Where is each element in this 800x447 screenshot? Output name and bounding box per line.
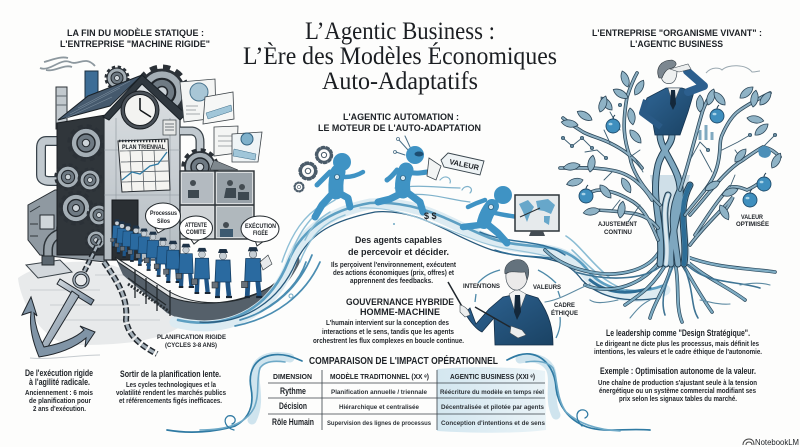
heading: agentic automation: LE MOTEUR DE L'AUTO-ADAPTATION: [318, 123, 481, 134]
callout: execution figee: [241, 216, 279, 246]
plan calendar: [118, 139, 170, 192]
label: cadre ethique: [551, 302, 579, 317]
heading: agentic automation: L'AGENTIC AUTOMATION :: [343, 112, 459, 123]
highlight column: [437, 367, 546, 433]
table header: DIMENSION: [273, 372, 312, 381]
callout: execution figee: EXÉCUTION: [245, 222, 276, 230]
leaves: [619, 70, 631, 88]
illustration: visionary leader in tree: [642, 60, 760, 135]
river of agentic flow: [175, 177, 665, 326]
text: execution rigide: [25, 368, 93, 413]
door and platform: [112, 200, 138, 260]
text: execution rigide: à l'agilité radicale.: [29, 377, 90, 387]
right pipe: [180, 131, 200, 152]
text: sortir de la planification: [116, 369, 226, 405]
text: exemple optimisation: [598, 366, 757, 403]
clock: [121, 91, 159, 129]
row: role humain: [272, 417, 545, 427]
plan calendar: PLAN TRIENNAL: [122, 144, 165, 151]
heading: organisme vivant: [592, 28, 762, 50]
text: sortir de la planification: Les cycles technologiques et la: [126, 380, 217, 389]
heading: machine rigide: [60, 27, 210, 50]
smoke: [40, 57, 95, 70]
chimneys: [56, 87, 67, 129]
row: decision: Hiérarchique et centralisée: [339, 404, 419, 411]
label: cadre ethique: ÉTHIQUE: [551, 308, 579, 317]
label: planification rigide: [157, 334, 227, 349]
callout: attente comite: ATTENTE: [185, 223, 207, 229]
branches: [560, 73, 780, 245]
text: gouvernance hybride: HOMME-MACHINE: [360, 307, 440, 317]
text: sortir de la planification: volatilité rendent les marchés publics: [116, 388, 226, 397]
text: sortir de la planification: et référencements figés inefficaces.: [119, 396, 222, 405]
text: execution rigide: De l'exécution rigide: [25, 368, 93, 378]
text: agents capables: [331, 235, 456, 285]
icon: world map monitor: [515, 195, 559, 236]
text: execution rigide: de planification pour: [29, 396, 91, 405]
text: execution rigide: Anciennement : 6 mois: [25, 388, 93, 397]
row: decision: [279, 401, 544, 411]
text: sortir de la planification: Sortir de la planification lente.: [120, 369, 221, 379]
heading: organisme vivant: L'ENTREPRISE "ORGANISME VIVANT" :: [592, 28, 762, 39]
text: exemple optimisation: Une chaîne de production s'ajustant seule à la tension: [598, 378, 757, 387]
title: L’Agentic Business :: [305, 18, 495, 45]
callout: processus silos: Silos: [157, 219, 171, 225]
trunk: [650, 175, 690, 264]
heading: machine rigide: L'ENTREPRISE "MACHINE RIGIDE": [60, 39, 210, 50]
table header: [273, 372, 535, 381]
apples: [606, 115, 620, 133]
label: intentions: INTENTIONS: [463, 283, 501, 290]
label: valeur optimisee: OPTIMISÉE: [736, 219, 770, 228]
roof: [58, 75, 142, 120]
left pipe: [41, 141, 60, 181]
text: agents capables: Ils perçoivent l'environnement, exécutent: [331, 260, 456, 269]
heading: agentic automation: [318, 112, 481, 134]
text: gouvernance hybride: orchestrent les flux complexes en boucle continue.: [313, 336, 464, 345]
text: gouvernance hybride: GOUVERNANCE HYBRIDE: [346, 297, 454, 307]
label: planification rigide: PLANIFICATION RIGIDE: [157, 334, 227, 341]
text: exemple optimisation: énergétique ou un système commercial modifiant ses: [599, 386, 756, 395]
callout: attente comite: [180, 216, 212, 244]
offices: [180, 171, 254, 239]
workers queue: [111, 219, 272, 297]
pump: [48, 232, 64, 262]
title: [243, 18, 557, 95]
front wall: [104, 80, 180, 260]
row: decision: Décentralisée et pilotée par agents: [441, 404, 544, 411]
heading: machine rigide: LA FIN DU MODÈLE STATIQUE :: [67, 27, 204, 39]
table heading: COMPARAISON DE L'IMPACT OPÉRATIONNEL: [309, 355, 498, 367]
text: gouvernance hybride: L'humain intervient sur la conception des: [326, 318, 449, 327]
row: role humain: Conception d'intentions et de sens: [441, 420, 545, 427]
back gear: [138, 68, 186, 116]
text: leadership design strategique: Le leadership comme "Design Stratégique".: [606, 328, 750, 338]
label: ajustement continu: [598, 221, 637, 236]
agent: second: [378, 136, 427, 212]
row: rythme: Planification annuelle / triennale: [331, 389, 427, 396]
text: agents capables: de percevoir et décider.: [348, 247, 449, 257]
text: leadership design strategique: Le dirigeant ne dicte plus les processus, mais définit les: [596, 339, 759, 348]
grid: [268, 370, 545, 430]
callout: processus silos: [146, 203, 180, 233]
tag: valeur: [427, 153, 484, 180]
callout: execution figee: FIGÉE: [253, 229, 268, 237]
text: gouvernance hybride: interactions et le sens, tandis que les agents: [322, 327, 454, 336]
label: valeur optimisee: VALEUR: [741, 214, 763, 221]
label: ajustement continu: CONTINU: [604, 229, 632, 236]
callout: attente comite: COMITE: [186, 230, 206, 236]
table header: AGENTIC BUSINESS (XXI ᵉ): [450, 372, 535, 381]
text: exemple optimisation: prix selon les signaux tables du marché.: [619, 394, 737, 403]
label: planification rigide: (CYCLES 3-8 ANS): [165, 342, 217, 349]
tag: valeur: VALEUR: [449, 157, 480, 172]
wave frame left: [167, 355, 302, 432]
text: gouvernance hybride: [313, 297, 464, 345]
title: L’Ère des Modèles Économiques: [243, 42, 557, 70]
ground: [18, 262, 190, 345]
agent: third: [463, 186, 518, 243]
icon: anchor: [22, 273, 100, 358]
text: execution rigide: 2 ans d'exécution.: [33, 404, 86, 413]
callout: processus silos: Processus: [150, 211, 178, 217]
text: agents capables: apprennent des feedbacks.: [350, 276, 433, 285]
agent: first: [294, 147, 363, 217]
row: decision: Décision: [279, 401, 307, 411]
table header: MODÈLE TRADITIONNEL (XX ᵉ): [330, 372, 429, 381]
wave frame right: [507, 354, 650, 431]
roots: [545, 250, 775, 322]
illustration: leader with pointer: [448, 260, 560, 345]
lower machinery: [28, 190, 105, 262]
text: agents capables: Des agents capables: [355, 235, 442, 245]
row: rythme: Rythme: [280, 386, 306, 396]
chain to anchor: [84, 240, 157, 354]
row: rythme: [280, 386, 544, 396]
label: ajustement continu: AJUSTEMENT: [598, 221, 637, 228]
symbol: dollars: $ $: [424, 211, 437, 221]
label: valeurs: VALEURS: [533, 284, 562, 291]
title: Auto-Adaptatifs: [322, 68, 478, 95]
text: agents capables: des actions économiques (prix, offres) et: [333, 268, 454, 277]
text: exemple optimisation: Exemple : Optimisation autonome de la valeur.: [600, 366, 756, 376]
heading: organisme vivant: L'AGENTIC BUSINESS: [630, 39, 724, 50]
label: valeur optimisee: [736, 214, 770, 228]
documents: [180, 79, 262, 162]
comparison table panel: [167, 354, 650, 433]
row: rythme: Réécriture du modèle en temps réel: [440, 389, 544, 396]
text: leadership design strategique: intentions, les valeurs et le cadre éthique de l'autonomie.: [594, 347, 762, 356]
machine room: [57, 115, 106, 255]
right gear: [184, 150, 216, 184]
text: leadership design strategique: [594, 328, 762, 356]
row: role humain: Rôle Humain: [272, 417, 314, 427]
illustration: living tree: [545, 70, 784, 322]
row: role humain: Supervision des lignes de processus: [327, 420, 431, 427]
label: cadre ethique: CADRE: [554, 302, 576, 309]
illustration: factory: [18, 57, 302, 345]
